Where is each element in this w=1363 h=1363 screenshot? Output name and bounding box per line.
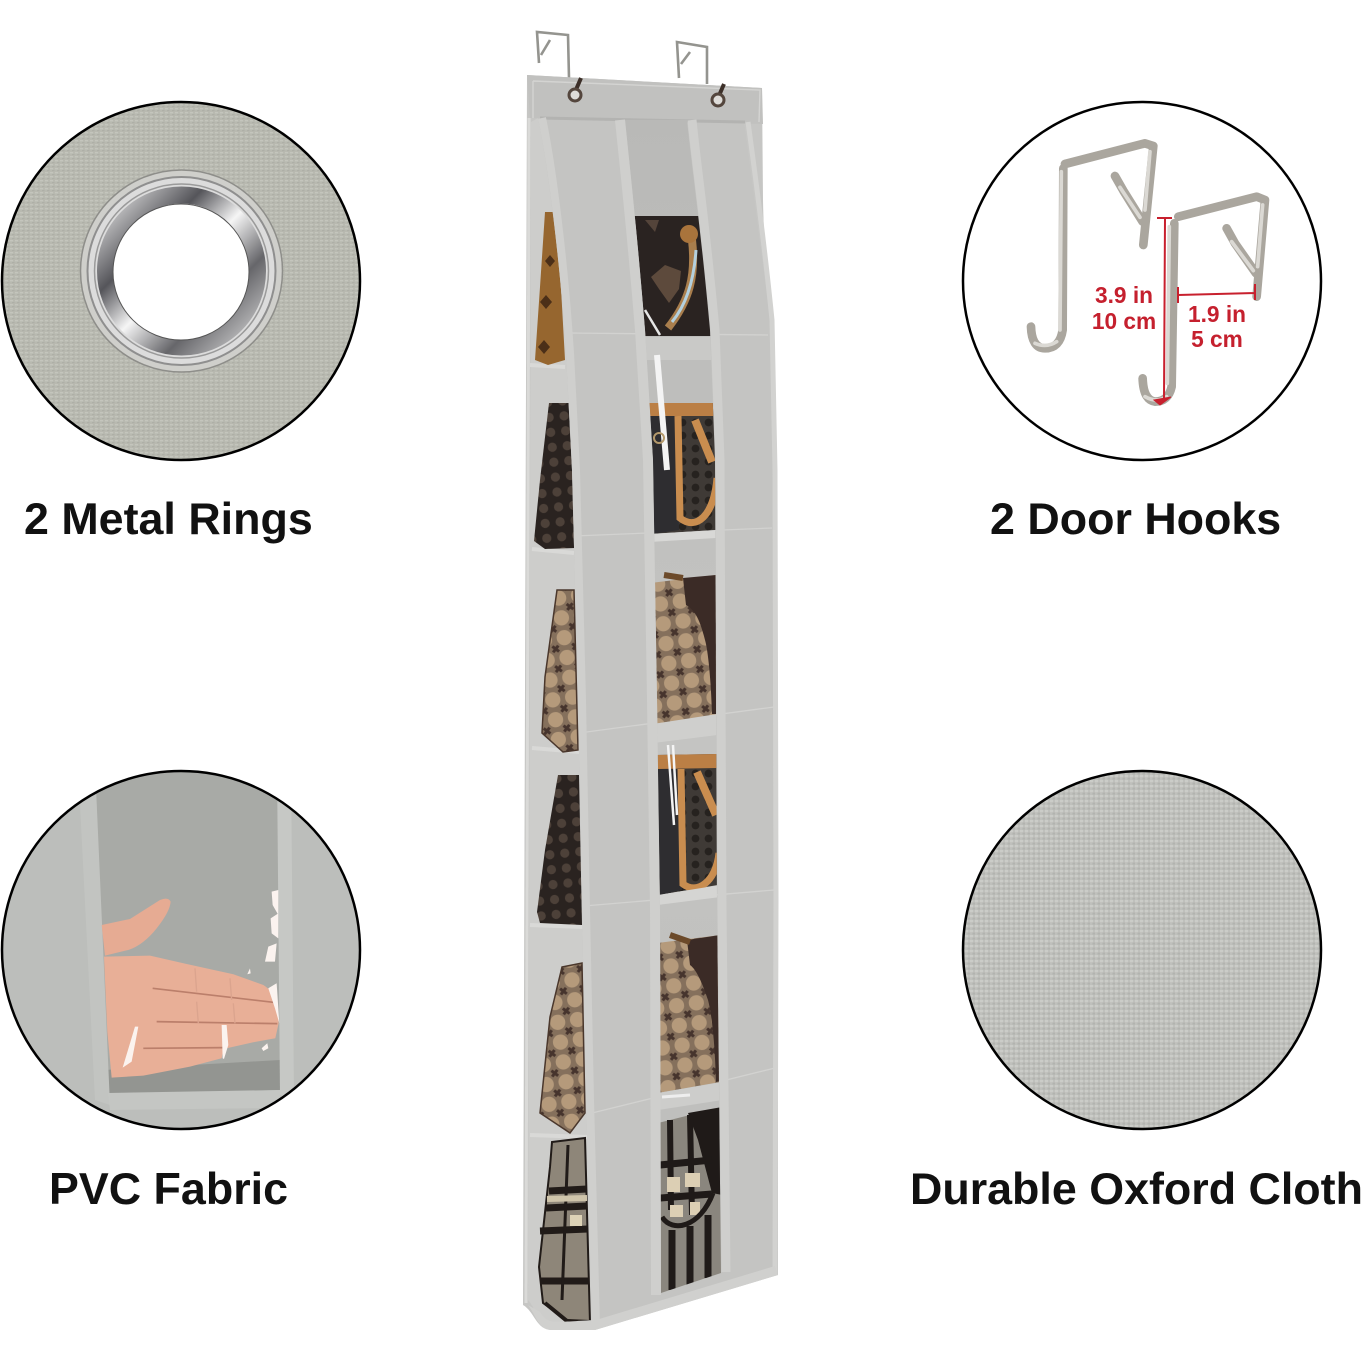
right binding strip bbox=[748, 122, 776, 1274]
left bag 5 bbox=[540, 963, 585, 1133]
main front flap bbox=[538, 118, 775, 1328]
panel: oxford cloth bbox=[963, 771, 1321, 1129]
shelf 3 bbox=[658, 714, 716, 742]
panel: door hooks bbox=[963, 102, 1321, 460]
left bag 3 bbox=[542, 590, 578, 752]
window left binding strip bbox=[620, 120, 656, 1295]
dimension text: 3.9 in bbox=[1095, 282, 1153, 308]
right seam strip bbox=[277, 800, 294, 1096]
hem shadow bbox=[540, 118, 745, 122]
bottom hem bbox=[528, 1266, 778, 1330]
palm and fingers bbox=[104, 956, 279, 1078]
dimension text: 5 cm bbox=[1191, 326, 1243, 352]
center bag 2 bbox=[645, 355, 717, 534]
center bag 1 bbox=[630, 216, 712, 336]
center bag 3 bbox=[650, 575, 716, 724]
window contents bbox=[630, 216, 724, 1295]
hand and glare bbox=[102, 890, 279, 1078]
bottom seam strip bbox=[110, 1090, 280, 1095]
left bag 1 bbox=[535, 212, 565, 365]
metal ring bbox=[80, 170, 282, 372]
hem seam bbox=[533, 81, 760, 122]
fabric circle bbox=[2, 102, 360, 460]
shelf seams on flap bbox=[566, 333, 775, 1114]
center bag 5 bbox=[658, 935, 720, 1093]
left bag 6 plaid bbox=[539, 1138, 590, 1323]
heading: 2 metal rings: 2 Metal Rings bbox=[24, 494, 313, 544]
product: hanging organizer bbox=[523, 32, 778, 1330]
circle outline bbox=[2, 771, 360, 1129]
grommet 1 bbox=[569, 78, 581, 101]
left bag 4 bbox=[537, 775, 582, 925]
circle outline bbox=[963, 102, 1321, 460]
fabric background bbox=[2, 771, 360, 1129]
finger creases bbox=[143, 988, 277, 1048]
panel: metal rings bbox=[2, 102, 360, 460]
darker band bbox=[104, 1060, 280, 1095]
shelf 1 bbox=[646, 337, 711, 360]
heading: PVC fabric: PVC Fabric bbox=[49, 1164, 288, 1214]
heading: 2 door hooks: 2 Door Hooks bbox=[990, 494, 1281, 544]
shelf 5 bbox=[660, 1083, 719, 1110]
center bag 4 bbox=[655, 745, 719, 895]
top hem bbox=[527, 75, 763, 124]
shelf 2 bbox=[654, 530, 716, 542]
organizer back panel bbox=[523, 75, 778, 1330]
dimension text: 10 cm bbox=[1092, 308, 1156, 334]
grommet 2 bbox=[712, 84, 724, 106]
clear pane bbox=[96, 772, 280, 1070]
left seam strip bbox=[96, 794, 110, 1095]
knuckle shading bbox=[195, 968, 235, 1023]
center bag 6 plaid bbox=[658, 1107, 724, 1295]
hook illustration bbox=[1031, 143, 1265, 402]
window right binding strip bbox=[692, 120, 726, 1272]
left bag 2 bbox=[534, 403, 575, 549]
dimension text bbox=[1092, 282, 1246, 352]
clear PVC pane and hand bbox=[96, 772, 294, 1096]
shelf 4 bbox=[660, 886, 717, 904]
flap left binding strip bbox=[542, 118, 596, 1325]
left side compartment bbox=[526, 118, 593, 1330]
center clear window bbox=[625, 120, 721, 1293]
door hooks on top of organizer bbox=[537, 32, 707, 84]
thumb bbox=[102, 899, 171, 956]
panel: PVC fabric bbox=[2, 765, 360, 1129]
glare patches bbox=[123, 890, 279, 1068]
dimension lines bbox=[1154, 218, 1255, 405]
left bag 1 stars bbox=[538, 255, 555, 354]
heading: durable oxford cloth: Durable Oxford Cloth bbox=[910, 1164, 1363, 1214]
dimension text: 1.9 in bbox=[1188, 301, 1246, 327]
